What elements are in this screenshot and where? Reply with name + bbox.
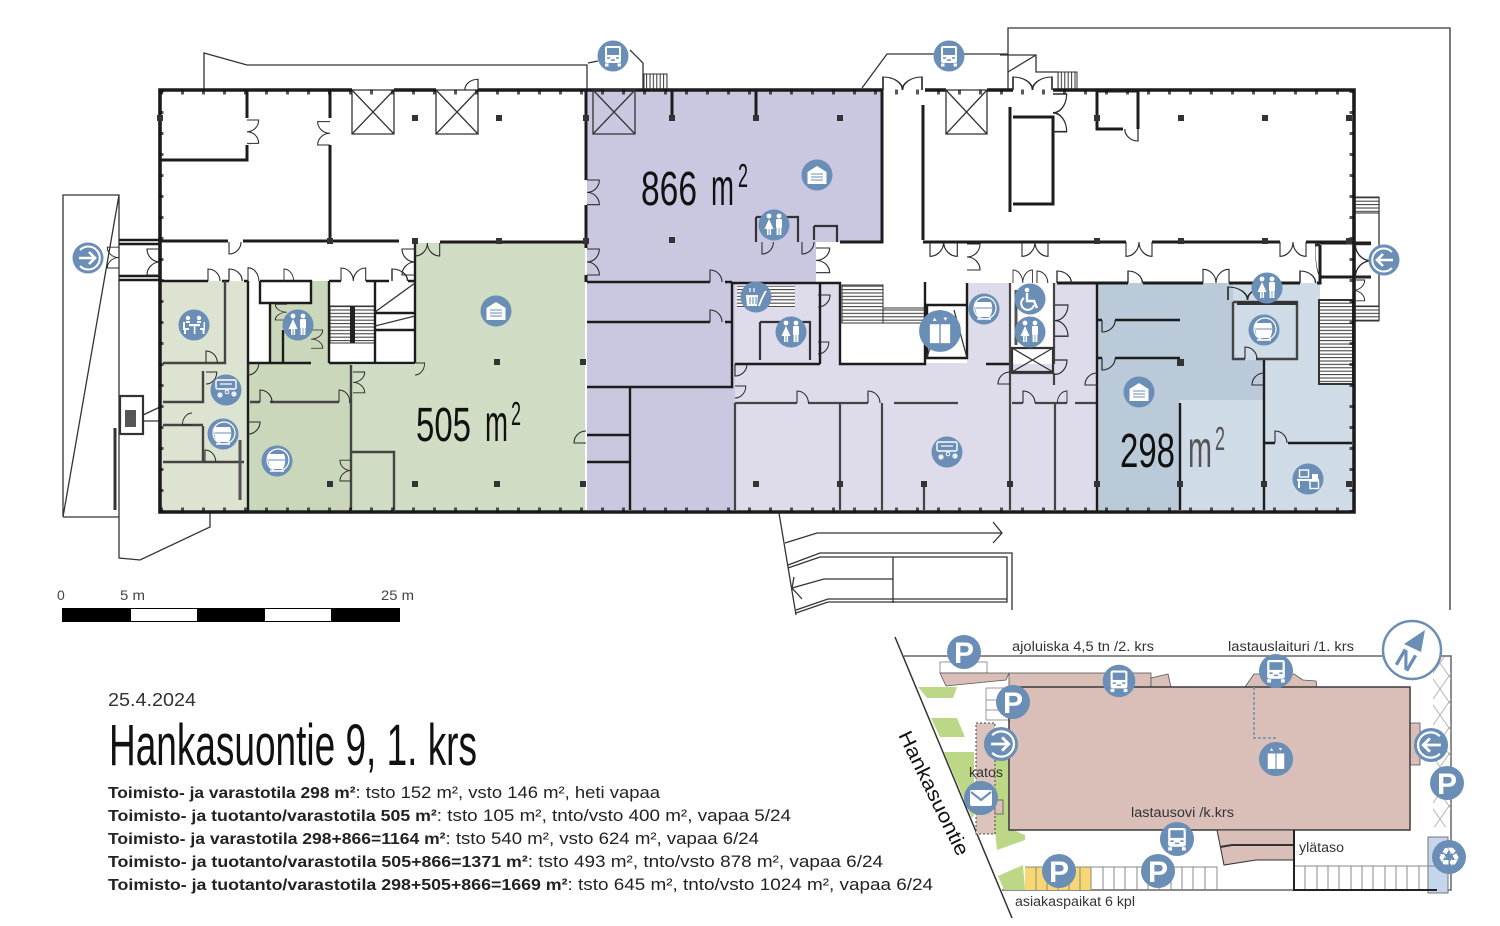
icon: customer parking: P (1049, 856, 1069, 889)
area: 505 m2 main green (351, 243, 585, 512)
area label 505 m2: m (485, 395, 508, 453)
stripes by entrance (986, 688, 1009, 720)
area label 866 m2: 2 (738, 157, 748, 194)
option 505: Toimisto- ja tuotanto/varastotila 505 m² : tsto 105 m², tnto/vsto 400 m², vapaa 5/24 (108, 806, 791, 825)
green patches (918, 687, 1025, 890)
area: light blue 298 m2 (1180, 283, 1352, 510)
option 298+866: Toimisto- ja varastotila 298+866=1164 m² : tsto 540 m², vsto 624 m², vapaa 6/24 (108, 829, 759, 848)
option 505+866: Toimisto- ja tuotanto/varastotila 505+866=1371 m² : tsto 493 m², tnto/vsto 878 m², vapaa 6/24 (108, 852, 883, 871)
icon: coffee room blue (1248, 314, 1280, 346)
panel: site plan (894, 621, 1466, 918)
area label 866 m2 (641, 157, 748, 217)
icon: air conditioning centre (932, 436, 962, 468)
icon: north compass (1383, 621, 1441, 679)
area label 298 m2: m (1188, 421, 1212, 479)
icon: entrance (984, 727, 1018, 761)
icon: north compass: N (1390, 642, 1422, 678)
text block: area options (108, 783, 933, 894)
icon: parking east (1430, 766, 1464, 801)
icon: recycling: ♻ (1437, 843, 1461, 873)
customer parking yellow (1025, 867, 1091, 890)
icon: elevator (919, 310, 961, 352)
option 298+505+866: Toimisto- ja tuotanto/varastotila 298+505+866=1669 m² : tsto 645 m², tnto/vsto 1024 m², vapaa 6/24 (108, 875, 933, 894)
icon: parking north west: P (954, 637, 974, 670)
scale bar: 25 m (381, 587, 414, 603)
icon: entrance arrow west (72, 242, 104, 274)
area: light green office (162, 281, 247, 512)
icon: truck north (1103, 665, 1135, 697)
icon: parking south: P (1148, 856, 1168, 889)
herringbone paving (1433, 657, 1451, 827)
walls (119, 90, 1371, 512)
icon: recycling (1432, 840, 1466, 874)
label: ylätaso: ylätaso (1299, 840, 1344, 855)
icon: mail (964, 781, 998, 815)
icon: accessible toilet (1014, 284, 1046, 314)
icon: coffee room west (208, 418, 238, 450)
icon: warehouse 866 (802, 160, 832, 190)
icon: parking by entrance (996, 685, 1030, 720)
site outline thin lines (63, 28, 1450, 610)
icon: toilets centre (776, 316, 806, 348)
icon: warehouse 505 (480, 296, 512, 326)
icon: coffee room centre (968, 294, 1000, 324)
icon: air conditioning west (210, 374, 242, 406)
site boundary lines (895, 637, 1451, 918)
area label 298 m2: 2 (1215, 420, 1225, 457)
area label 505 m2 (416, 395, 521, 453)
icon: toilets blue (1252, 272, 1282, 304)
area label 505 m2: 505 (416, 399, 471, 452)
icon: truck loading dock (1259, 654, 1293, 688)
label: street name: Hankasuontie (894, 728, 973, 859)
icon: coffee room green (262, 446, 292, 476)
parking spot box (940, 662, 987, 673)
area label 866 m2: m (711, 159, 734, 217)
icon: toilets east centre (1014, 316, 1046, 348)
doors (107, 77, 1371, 481)
building footprint (1009, 687, 1410, 830)
icon: loading truck west (598, 40, 628, 72)
scale bar (57, 587, 414, 622)
icon: office (1292, 464, 1324, 494)
loading ramp with arrows (779, 513, 1012, 615)
icon: parking north west (947, 635, 981, 670)
upper level parking (1294, 830, 1437, 890)
scale bar: 5 m (120, 587, 145, 603)
icon: exit arrow east (1368, 244, 1400, 276)
icon: exit arrow (1414, 728, 1448, 762)
stairs (330, 72, 1379, 384)
area: 866 m2 dark purple (587, 91, 882, 510)
icon: truck south (1160, 822, 1194, 856)
label: lastauslaituri: lastauslaituri /1. krs (1228, 639, 1354, 654)
label: katos: katos (969, 765, 1003, 780)
scale bar: 0 (57, 587, 65, 603)
icon: elevator (1259, 742, 1293, 776)
electrical box (115, 396, 143, 510)
title: Hankasuontie 9, 1. krs (109, 713, 477, 778)
label: lastausovi: lastausovi /k.krs (1131, 805, 1234, 820)
area: dark blue 298 m2 (1097, 283, 1264, 510)
area: green production room (248, 281, 351, 512)
option 298: Toimisto- ja varastotila 298 m² : tsto 152 m², vsto 146 m², heti vapaa (108, 783, 661, 802)
covered canopy katos (976, 723, 995, 834)
area label 866 m2: 866 (641, 163, 697, 216)
parking grid (1025, 867, 1217, 890)
label: ajoluiska: ajoluiska 4,5 tn /2. krs (1012, 639, 1154, 654)
panel: floor plan (63, 28, 1450, 615)
columns (157, 115, 1352, 487)
area label 298 m2: 298 (1120, 425, 1175, 478)
icon: toilets 866 (758, 210, 790, 240)
icon: parking east: P (1437, 768, 1457, 801)
icon: loading truck east (934, 40, 964, 72)
icon: parking south (1141, 854, 1175, 889)
area label 298 m2 (1120, 420, 1225, 479)
icon: cleaning room (740, 282, 772, 312)
perimeter ticks (160, 90, 1354, 512)
area label 505 m2: 2 (511, 395, 521, 432)
recycling area (1428, 837, 1448, 893)
icon: meeting room (178, 310, 210, 340)
label: asiakaspaikat: asiakaspaikat 6 kpl (1015, 894, 1135, 909)
route to elevator (1254, 687, 1277, 738)
south ramp (1217, 830, 1294, 865)
icon: customer parking (1042, 854, 1076, 889)
north annex structures (940, 673, 1420, 814)
icon: warehouse 298 (1124, 376, 1154, 408)
icon: parking by entrance: P (1003, 687, 1023, 720)
date: 25.4.2024 (108, 690, 196, 710)
icon: toilets green (282, 310, 314, 340)
area: light purple office wing (735, 283, 1097, 510)
